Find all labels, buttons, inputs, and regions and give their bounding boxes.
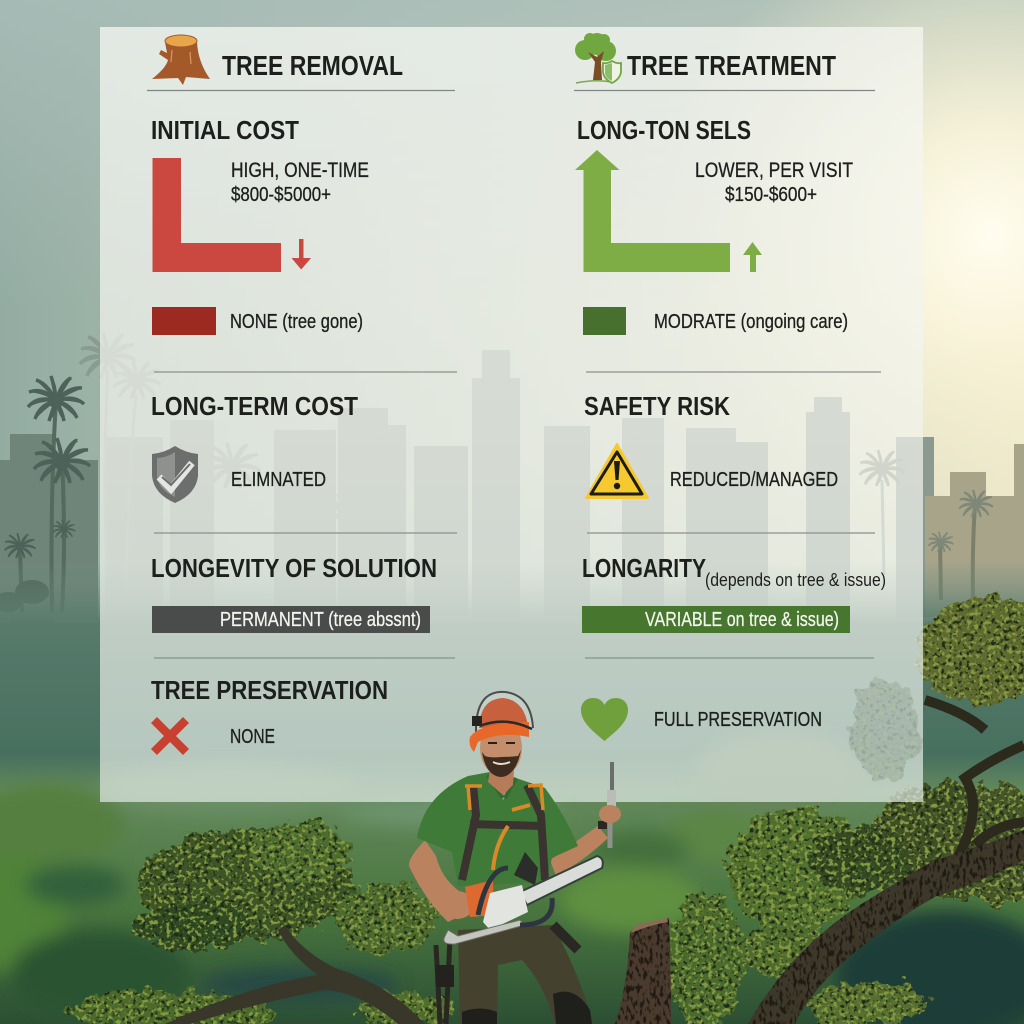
- worker head: [480, 720, 522, 795]
- icon: green up arrow: [743, 242, 762, 272]
- background: palm trees: [0, 333, 993, 612]
- text: full preservation: FULL PRESERVATION: [654, 709, 822, 731]
- heading: long-ton sels: LONG-TON SELS: [577, 115, 751, 145]
- text: depends on tree and issue: (depends on tree & issue): [705, 570, 886, 590]
- heading: longarity: LONGARITY: [582, 553, 706, 583]
- icon: green heart: [581, 698, 628, 741]
- heading: safety risk: SAFETY RISK: [584, 391, 730, 421]
- background: misty lower hills: [0, 560, 1024, 1024]
- heading: initial cost: INITIAL COST: [151, 115, 299, 145]
- foreground: oak tree left: [65, 822, 453, 1024]
- icon: red cross: [151, 717, 189, 755]
- tool in raised hand: [598, 762, 621, 848]
- icon: red down arrow: [292, 239, 311, 270]
- bar: variable: VARIABLE on tree & issue): [645, 609, 839, 631]
- icon: tree stump: [152, 35, 210, 85]
- icon: tree with shield: [575, 33, 621, 83]
- bar: permanent: [152, 606, 430, 633]
- swatch: dark green: [583, 307, 626, 335]
- worker helmet: [470, 692, 533, 752]
- background: city skyline: [0, 350, 1024, 627]
- text: high one-time: HIGH, ONE-TIME: [231, 159, 369, 182]
- text: removal price: $800-$5000+: [231, 184, 331, 206]
- text: moderate ongoing care: MODRATE (ongoing care): [654, 311, 848, 333]
- heading: long-term cost: LONG-TERM COST: [151, 391, 358, 421]
- heading: tree treatment: TREE TREATMENT: [627, 50, 836, 81]
- worker legs: [436, 925, 593, 1024]
- text: reduced managed: REDUCED/MANAGED: [670, 469, 838, 491]
- chart: green L arrow: [575, 150, 730, 272]
- faded tree behind panel: [849, 680, 921, 780]
- foreground: oak tree right: [667, 596, 1024, 1024]
- heading: tree removal: TREE REMOVAL: [222, 50, 403, 81]
- text: none: NONE: [230, 726, 275, 748]
- worker: arborist with chainsaw: [409, 692, 621, 1024]
- worker arms: [409, 826, 608, 922]
- translucent comparison panel: [100, 27, 923, 802]
- text: treatment price: $150-$600+: [725, 184, 817, 206]
- text: eliminated: ELIMNATED: [231, 469, 326, 491]
- text: none tree gone: NONE (tree gone): [230, 311, 363, 333]
- worker harness: [462, 775, 545, 880]
- worker shirt: [417, 772, 578, 886]
- chainsaw: [444, 852, 603, 944]
- cut tree stump: [615, 918, 671, 1024]
- heading: tree preservation: TREE PRESERVATION: [151, 675, 388, 705]
- heading: longevity of solution: LONGEVITY OF SOLUTION: [151, 553, 437, 583]
- icon: shield with check: [152, 446, 198, 503]
- swatch: dark red: [152, 307, 216, 335]
- column: tree removal: [147, 35, 457, 755]
- bar: permanent: PERMANENT (tree abssnt): [220, 609, 421, 631]
- chart: red L bar: [152, 158, 281, 272]
- text: lower per visit: LOWER, PER VISIT: [695, 159, 853, 182]
- icon: warning triangle: [586, 444, 648, 498]
- column: tree treatment: [574, 33, 886, 741]
- bar: variable: [582, 606, 850, 633]
